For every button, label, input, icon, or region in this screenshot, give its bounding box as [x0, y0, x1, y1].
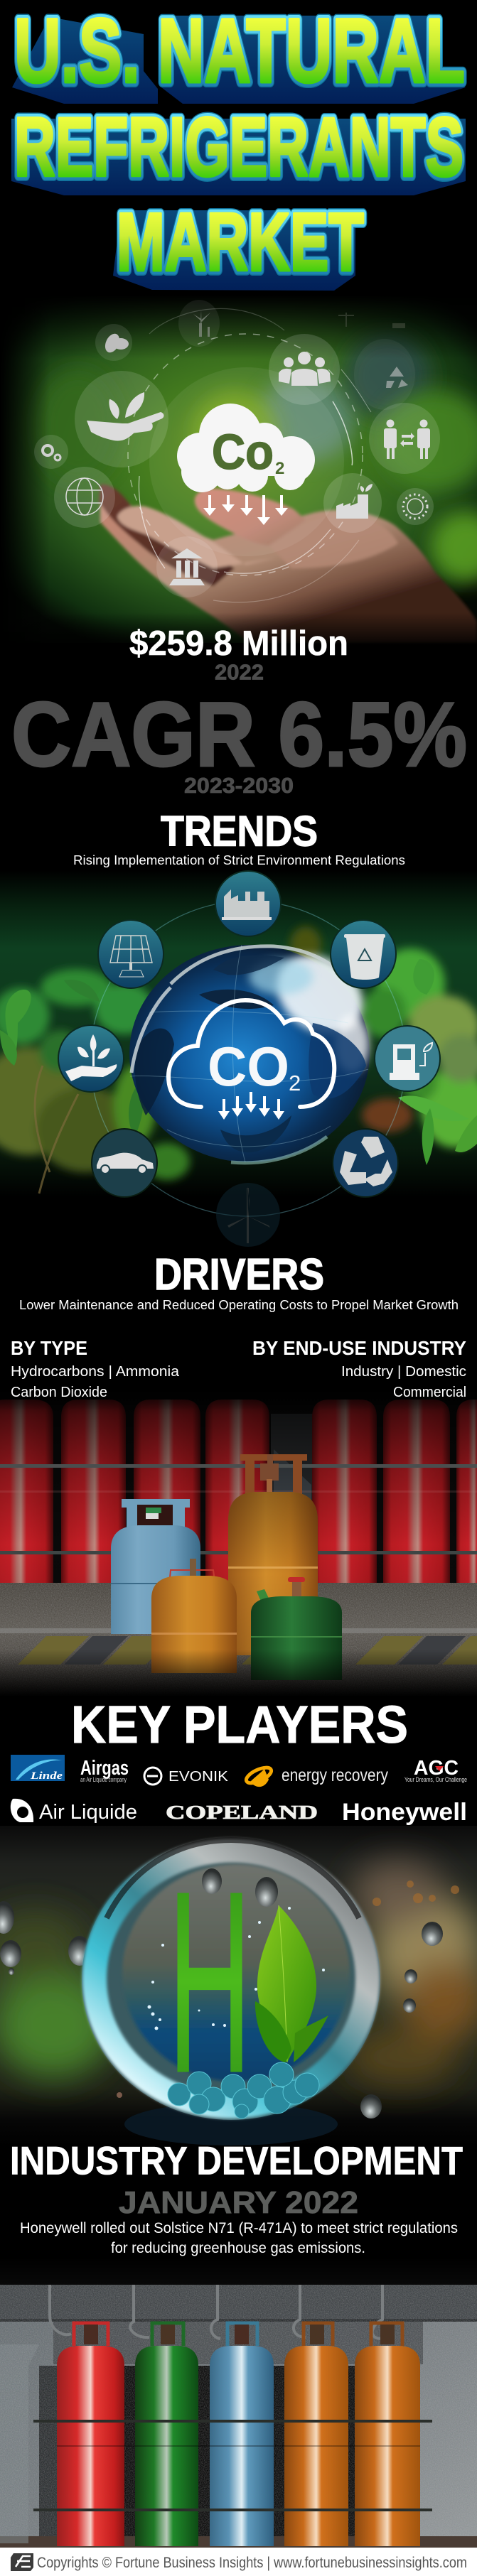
blue cylinder	[210, 2323, 274, 2546]
heading: drivers: DRIVERS	[154, 1250, 324, 1299]
forecast period: 2023-2030	[184, 773, 294, 798]
red cylinder	[57, 2323, 124, 2546]
logo: Airgas: Airgas	[80, 1757, 129, 1780]
small orange gas bottle	[151, 1559, 237, 1673]
development text: Honeywell rolled out Solstice N71 (R-471A) to meet strict regulations	[20, 2220, 458, 2236]
title	[11, 0, 466, 291]
retaining rails	[33, 2420, 432, 2511]
logo: Evonik: EVONIK	[168, 1769, 229, 1785]
orbit ring	[90, 901, 406, 1216]
green gas bottle	[251, 1577, 342, 1680]
large translucent disc and dashed orbit rings	[128, 308, 371, 602]
icon: CO2 cloud outline: CO	[208, 1035, 289, 1098]
panel: red cylinders and gas bottles photo	[0, 1378, 477, 1696]
leaves	[255, 1905, 328, 2062]
development date: JANUARY 2022	[119, 2185, 358, 2220]
icon: faint scale and monitor	[338, 313, 405, 328]
icon: hand holding leaves	[87, 392, 164, 440]
logos: key players	[11, 1755, 467, 1826]
icon: wind turbine circle	[216, 1183, 280, 1247]
icon: CO2 cloud outline: 2	[289, 1071, 301, 1095]
wall	[0, 2259, 477, 2548]
logo: Airgas	[80, 1757, 129, 1783]
segment: by type: BY TYPE	[11, 1337, 87, 1359]
logo: Copeland: COPELAND	[166, 1802, 318, 1823]
drivers text: Lower Maintenance and Reduced Operating Costs to Propel Market Growth	[19, 1297, 459, 1312]
segment: by type	[11, 1337, 180, 1400]
icon: downward arrows	[203, 495, 288, 525]
icon: factory with leaf	[336, 484, 373, 519]
icon: Fortune Business Insights logo	[11, 2553, 33, 2571]
icon: solar panel circle	[98, 920, 164, 988]
icon: recycle circle	[333, 1129, 398, 1197]
floor with hazard stripes	[0, 1583, 477, 1696]
plants left and right	[0, 926, 477, 1194]
panel: hydrogen bubble illustration: H	[168, 1838, 251, 2126]
icon: wind turbines	[193, 310, 210, 337]
water droplets	[0, 1901, 443, 2118]
icon: gears	[43, 445, 60, 460]
orange cylinder two	[355, 2323, 420, 2546]
icon: plant in hand circle	[58, 1025, 124, 1092]
hooks	[50, 2285, 382, 2339]
logo: Evonik	[144, 1768, 229, 1785]
logo: energy recovery: energy recovery	[282, 1765, 388, 1785]
icon: downward arrows	[218, 1092, 284, 1120]
logo: AGC: AGC	[414, 1757, 459, 1780]
heading: key players: KEY PLAYERS	[71, 1695, 408, 1754]
logo: Airgas: an Air Liquide company	[80, 1776, 127, 1783]
panel: hydrogen bubble illustration	[0, 1826, 477, 2146]
segment: by end-use industry: Commercial	[393, 1385, 466, 1400]
market size value: $259.8 Million	[129, 624, 348, 663]
green cylinder	[135, 2323, 198, 2546]
segment: by end-use industry: Industry | Domestic	[341, 1364, 466, 1380]
globe	[129, 939, 378, 1163]
icon: recycle	[386, 367, 408, 388]
segment: by end-use industry: BY END-USE INDUSTRY	[252, 1337, 466, 1359]
bubble	[82, 1840, 380, 2145]
icon: coins	[102, 332, 129, 355]
segment: by type: Carbon Dioxide	[11, 1385, 107, 1400]
segment: by end-use industry	[252, 1337, 466, 1400]
icon: factory circle	[215, 871, 281, 936]
icon: people exchange	[384, 419, 430, 459]
development text: for reducing greenhouse gas emissions.	[111, 2240, 365, 2256]
large orange gas bottle	[228, 1454, 318, 1655]
red cylinder row	[0, 1385, 477, 1591]
icon: sun	[403, 494, 427, 519]
icon: trash bin circle	[331, 920, 396, 988]
icon: CO2 cloud outline	[168, 1000, 334, 1107]
logo: energy recovery	[244, 1765, 388, 1787]
translucent icon circles	[34, 300, 440, 597]
hand	[99, 485, 477, 643]
icon: electric car circle	[92, 1129, 157, 1197]
icon: group of business people	[279, 352, 331, 386]
title: MARKET	[117, 196, 364, 288]
panel: five coloured cylinders photo	[0, 2259, 477, 2548]
title: MARKET	[117, 196, 364, 288]
development text	[20, 2220, 458, 2256]
footer	[0, 2548, 477, 2576]
panel: hero CO2 hand illustration	[0, 295, 477, 650]
segment: by type: Hydrocarbons | Ammonia	[11, 1364, 180, 1380]
orange cylinder one	[284, 2323, 348, 2546]
logo: Honeywell: Honeywell	[342, 1799, 467, 1826]
pebbles	[168, 2062, 319, 2118]
logo: AGC	[404, 1757, 467, 1784]
icon: fuel pump circle	[375, 1026, 440, 1091]
icon: CO2 cloud: 2	[275, 459, 284, 478]
icon: bank building	[169, 548, 205, 585]
trends text: Rising Implementation of Strict Environment Regulations	[73, 853, 405, 867]
base year: 2022	[215, 659, 264, 685]
logo: Air Liquide: Air Liquide	[39, 1801, 137, 1824]
heading: trends: TRENDS	[161, 807, 318, 855]
logo: Linde: Linde	[30, 1770, 63, 1782]
icon: CO2 cloud: Co	[212, 424, 274, 480]
logo: Air Liquide	[11, 1799, 137, 1824]
icon: globe	[66, 478, 103, 515]
blue gas bottle	[111, 1499, 200, 1634]
icon: CO2 cloud	[177, 404, 315, 492]
panel: CO2 globe illustration	[0, 870, 477, 1247]
title: MARKET	[117, 196, 364, 288]
logo: Linde	[11, 1755, 65, 1782]
